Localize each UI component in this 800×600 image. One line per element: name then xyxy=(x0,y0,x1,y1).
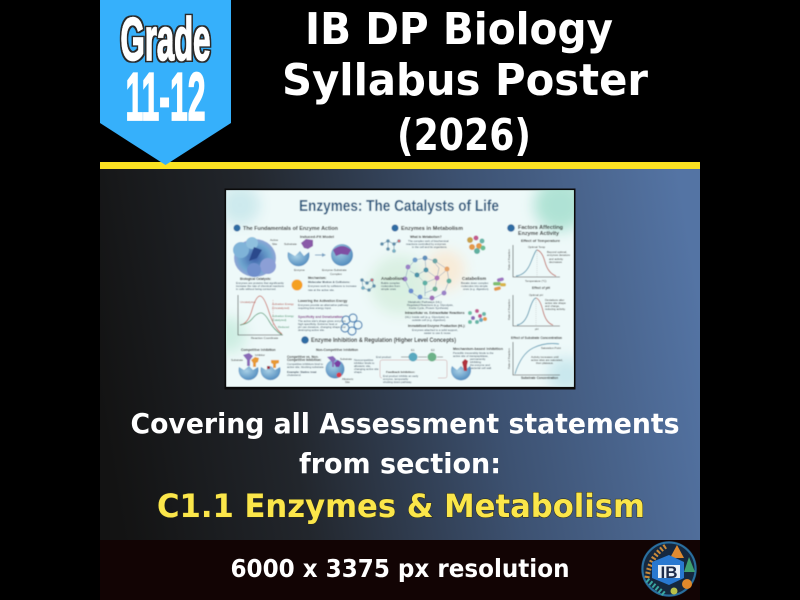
section 1: fundamentals: Specificity and Denaturation: xyxy=(298,315,344,319)
section 3: factors xyxy=(507,224,570,380)
anabolism label xyxy=(381,276,404,291)
section 4: inhibition: inhibitor binds to xyxy=(354,361,375,365)
icon: denatured protein xyxy=(341,314,362,335)
icon: competitive inhibition enzymes xyxy=(231,353,280,380)
section 1: fundamentals: high specificity. Extreme heat or xyxy=(298,322,338,326)
section 1: fundamentals: Active xyxy=(270,238,279,242)
substrate chart: then plateaus. xyxy=(536,361,554,365)
icon: capsules xyxy=(493,277,506,291)
anabolism label: Builds complex xyxy=(381,281,400,285)
energy chart xyxy=(238,295,294,340)
section 4: inhibition: changing active site xyxy=(354,367,379,371)
icon: competitive inhibition enzymes: Substrate xyxy=(231,358,243,362)
section 4: inhibition: permanently xyxy=(470,357,486,361)
substrate chart: Activity increases until xyxy=(531,355,559,359)
energy chart: Activation Energy xyxy=(272,302,294,306)
energy chart: Reaction Coordinate xyxy=(251,336,279,340)
title xyxy=(282,4,648,161)
icon: molecule xyxy=(360,278,376,292)
catabolism label: ones (e.g. digestion). xyxy=(463,287,489,291)
section 2: enzymes in metabolism: Enzymes in Metabolism xyxy=(401,226,463,232)
feedback pathway: E1 xyxy=(411,348,415,352)
section 1: fundamentals: requiring less energy input. xyxy=(298,306,332,310)
section 4: inhibition: Competitive Inhibition: xyxy=(287,358,322,362)
icon: induced fit diagram: Enzyme xyxy=(294,268,305,272)
section 2: enzymes in metabolism xyxy=(360,224,506,335)
section 4: inhibition: Non-Competitive Inhibition xyxy=(316,348,358,352)
anabolism label: simple ones xyxy=(381,287,397,291)
pH chart: Optimal pH xyxy=(529,293,543,297)
icon: small molecule set xyxy=(468,309,487,324)
section 2: enzymes in metabolism: Enzymes attached to a solid support, xyxy=(412,328,458,332)
title: (2026) xyxy=(397,110,531,161)
section 4: inhibition: active site of transpeptidase, xyxy=(453,354,489,358)
catabolism label xyxy=(461,276,489,291)
section 4: inhibition: Competitive vs. Non- xyxy=(287,355,319,359)
temperature chart: Optimal Temp xyxy=(528,245,546,249)
substrate chart: Rate of Reaction xyxy=(507,348,511,369)
section 1: fundamentals: Mechanism: xyxy=(308,276,326,280)
section 2: enzymes in metabolism: Krebs Cycle, Protein Synthesis) xyxy=(409,306,448,310)
icon: non-competitive enzyme xyxy=(326,356,354,384)
section 2: enzymes in metabolism: Intracellular vs. Extracellular Reactions xyxy=(405,311,465,315)
substrate chart: Substrate Concentration xyxy=(521,376,558,380)
feedback pathway: E2 xyxy=(431,348,435,352)
icon: induced fit diagram: Complex xyxy=(330,272,342,276)
catabolism label: Breaks down complex xyxy=(461,281,489,285)
section 4: inhibition: the enzyme and xyxy=(470,363,490,367)
pH chart: Rate of Reaction xyxy=(507,299,511,320)
temperature chart: Beyond optimal, xyxy=(547,250,567,254)
section 4: inhibition xyxy=(231,336,504,386)
temperature chart: decreases xyxy=(549,260,563,264)
section 1: fundamentals: in cells without being consumed. xyxy=(236,287,276,291)
section 2: enzymes in metabolism: Metabolic Pathways (HL): xyxy=(408,300,442,304)
section 2: enzymes in metabolism: easier to use & reuse. xyxy=(424,331,451,335)
subtitle xyxy=(130,407,680,480)
section 4: inhibition: bacterial cell wall. xyxy=(470,366,492,370)
yellow divider band xyxy=(100,162,700,169)
section 1: fundamentals: The active site's shape gives enzymes xyxy=(298,319,346,323)
section 1: fundamentals: increase the rate of chemical reactions xyxy=(236,284,284,288)
icon: non-competitive enzyme: Allosteric xyxy=(342,377,354,381)
section 2: enzymes in metabolism: (HL): Inside cell (e.g. Glycolysis) vs. xyxy=(405,315,450,319)
pH chart: reducing activity. xyxy=(545,307,566,311)
icon: mechanism-based enzyme xyxy=(451,359,471,380)
section name highlight: C1.1 Enzymes & Metabolism xyxy=(157,487,645,525)
section 4: inhibition: Example: Statins treat xyxy=(287,370,316,374)
section 2: enzymes in metabolism: outside cell (e.g. digestion). xyxy=(412,318,446,322)
section 1: fundamentals: destroying active site. xyxy=(298,328,325,332)
pH chart: pH xyxy=(535,327,539,331)
section 4: inhibition: cholesterol. xyxy=(287,373,302,377)
footer bar xyxy=(100,540,700,600)
section 3: factors: Effect of Substrate Concentration xyxy=(511,336,562,340)
section 4: inhibition: Enzyme Inhibition & Regulation (Higher Level Concepts) xyxy=(311,338,456,344)
temperature chart xyxy=(507,245,570,283)
section 4: inhibition: shape. xyxy=(354,370,363,374)
icon: induced fit diagram: Enzyme-Substrate xyxy=(322,268,347,272)
icon: competitive inhibition enzymes: Inhibitor xyxy=(255,353,265,357)
pH chart: and charge, xyxy=(545,304,560,308)
icon: coloured molecule cluster xyxy=(467,236,486,254)
section 4: inhibition: Noncompetitive xyxy=(354,358,374,362)
icon: sun burst xyxy=(292,280,302,290)
icon: enzyme blob xyxy=(233,237,276,277)
icon: induced fit diagram: Substrate xyxy=(284,242,297,246)
feedback pathway: shutting down pathway. xyxy=(383,380,412,384)
substrate chart: active sites are saturated, xyxy=(531,358,563,362)
temperature chart: and activity xyxy=(549,257,564,261)
pH chart: Deviations alter xyxy=(545,298,564,302)
section 4: inhibition: Competitive Inhibition xyxy=(241,348,276,352)
section 1: fundamentals: Site xyxy=(272,242,278,246)
section 3: factors: Effect of Temperature xyxy=(521,239,560,243)
section 2: enzymes in metabolism: Immobilized Enzyme Production (HL): xyxy=(408,324,465,328)
section 1: fundamentals: Induced-Fit Model xyxy=(300,234,334,239)
section 3: factors: Effect of pH xyxy=(532,286,551,290)
section 1: fundamentals: pH can denature, changing shape and xyxy=(298,325,346,329)
subtitle: from section: xyxy=(299,447,501,480)
icon: non-competitive enzyme: Substrate xyxy=(340,357,352,361)
substrate chart xyxy=(507,342,563,380)
subtitle: Covering all Assessment statements xyxy=(130,407,680,440)
section 1: fundamentals: rate at the active site. xyxy=(308,288,335,292)
feedback pathway: End product inhibits an early xyxy=(383,374,419,378)
section 1: fundamentals: The Fundamentals of Enzyme Action xyxy=(243,226,339,232)
section 2: enzymes in metabolism: What is Metabolism? xyxy=(410,235,442,239)
feedback pathway xyxy=(376,348,447,386)
title: Syllabus Poster xyxy=(282,55,648,106)
section 1: fundamentals: Molecular Motion & Collisions: xyxy=(308,280,350,284)
pH chart: active site shape xyxy=(545,301,566,305)
section 1: fundamentals: Biological Catalysts: xyxy=(240,277,271,281)
icon: molecule left xyxy=(380,240,400,252)
section 1: fundamentals: Enzymes provide an alternative pathway xyxy=(298,303,349,307)
energy chart: (Uncatalyzed) xyxy=(272,306,289,310)
section 4: inhibition: active site, blocking substrate. xyxy=(287,365,325,369)
catabolism label: Catabolism xyxy=(462,276,486,281)
section 2: enzymes in metabolism: in the cell and its organisms. xyxy=(412,245,448,249)
icon: non-competitive enzyme: Site xyxy=(345,380,350,384)
energy chart: Activation Energy xyxy=(272,314,294,318)
temperature chart: Rate of Reaction xyxy=(507,249,511,270)
grade ribbon badge xyxy=(100,0,231,165)
section 1: fundamentals xyxy=(233,224,362,340)
feedback pathway: Feedback Inhibition: xyxy=(386,370,415,374)
section 4: inhibition: Competitive inhibitors bind to xyxy=(287,362,323,366)
section 4: inhibition: Penicillin irreversibly binds to the xyxy=(453,351,494,355)
icon: induced fit diagram xyxy=(284,239,353,276)
catabolism label: molecules into simple xyxy=(461,284,488,288)
resolution note: 6000 x 3375 px resolution xyxy=(230,554,570,583)
icon: IB logo: IB xyxy=(660,563,678,582)
section 1: fundamentals: Lowering the Activation Energy xyxy=(298,299,348,303)
section 1: fundamentals: Enzymes are proteins that significantly xyxy=(236,281,284,285)
anabolism label: molecules from xyxy=(381,284,401,288)
energy chart: (Catalyzed) xyxy=(272,318,286,322)
section 3: factors: Enzyme Activity xyxy=(518,231,560,237)
anabolism label: Anabolism xyxy=(381,276,404,281)
icon: IB logo xyxy=(641,541,697,597)
section 4: inhibition: Mechanism-based Inhibition xyxy=(453,347,504,351)
grade ribbon badge: 11-12 xyxy=(126,59,206,135)
section 2: enzymes in metabolism: Regulated Reactions (e.g. Glycolysis, xyxy=(407,303,454,307)
pH chart xyxy=(507,293,566,331)
icon: metabolic network xyxy=(402,256,452,300)
poster title: Enzymes: The Catalysts of Life xyxy=(299,198,499,215)
energy chart: Reduced xyxy=(278,325,290,329)
temperature chart: Temperature (°C) xyxy=(525,279,547,283)
title: IB DP Biology xyxy=(305,4,613,55)
section 2: enzymes in metabolism: reactions controlled by enzymes xyxy=(406,242,447,246)
section 2: enzymes in metabolism: The complex web of biochemical xyxy=(408,239,449,243)
gradient panel xyxy=(100,169,700,540)
poster preview: Enzymes, The Catalysts of Life xyxy=(226,190,574,387)
section 3: factors: Factors Affecting xyxy=(518,225,563,231)
feedback pathway: enzyme, temporarily xyxy=(383,377,409,381)
grade label: Grade xyxy=(120,6,210,73)
section 1: fundamentals: Enzymes work by collisions to increase xyxy=(308,284,357,288)
section 4: inhibition: inhibiting xyxy=(470,360,481,364)
poster frame xyxy=(224,188,576,390)
temperature chart: enzymes denature xyxy=(547,253,570,257)
substrate chart: Saturation Point xyxy=(541,346,561,350)
section 4: inhibition: allosteric site, xyxy=(354,364,371,368)
feedback pathway: End product xyxy=(376,355,391,359)
energy chart: Uncatalyzed xyxy=(240,300,256,304)
